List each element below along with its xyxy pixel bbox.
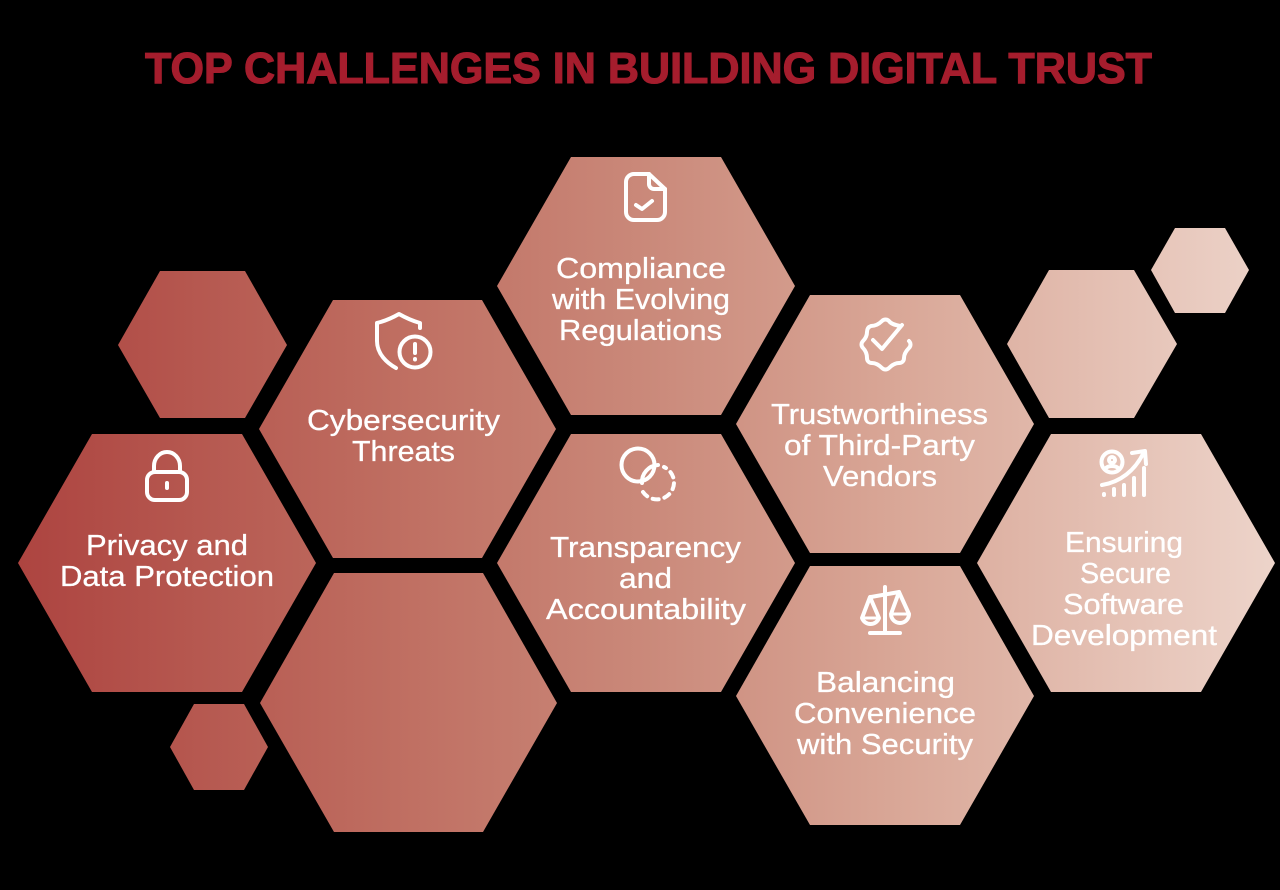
text: trustworthiness: [771, 399, 988, 493]
icon: lock: [147, 452, 187, 500]
icon: shield alert: [377, 314, 430, 368]
icon: overlapping circles: [622, 448, 674, 499]
decorative hexagon: upper right medium: [1007, 270, 1177, 418]
text: transparency: [546, 532, 747, 626]
text: transparency: and: [619, 563, 672, 595]
title: TOP CHALLENGES IN BUILDING DIGITAL TRUST: [145, 44, 1152, 93]
text: privacy: Data Protection: [60, 561, 274, 593]
panel: transparency: [497, 434, 795, 692]
text: trustworthiness: of Third-Party: [784, 430, 976, 462]
icon: growth chart: [1102, 451, 1146, 495]
decorative hexagon: upper left small: [118, 271, 287, 418]
text: compliance: [551, 253, 730, 347]
icon: scales: [862, 587, 909, 633]
icon: document check: [626, 174, 665, 220]
text: transparency: Accountability: [546, 594, 747, 626]
text: privacy: Privacy and: [86, 530, 248, 562]
text: trustworthiness: Trustworthiness: [771, 399, 988, 431]
text: balancing: Convenience: [794, 698, 976, 730]
text: privacy: [60, 530, 274, 593]
panel: compliance: [497, 157, 795, 415]
text: cybersecurity: Cybersecurity: [307, 405, 501, 437]
panel: third-party vendors: [736, 295, 1034, 553]
text: cybersecurity: Threats: [352, 436, 455, 468]
decorative hexagon: bottom large: [260, 573, 557, 832]
text: ensuring: Secure: [1080, 558, 1171, 590]
panel: secure software: [977, 434, 1275, 692]
text: cybersecurity: [307, 405, 501, 468]
text: compliance: Compliance: [556, 253, 726, 285]
text: ensuring: [1031, 527, 1217, 652]
text: ensuring: Development: [1031, 620, 1217, 652]
text: balancing: Balancing: [816, 667, 955, 699]
text: compliance: Regulations: [559, 315, 722, 347]
icon: badge check: [862, 320, 910, 370]
text: ensuring: Software: [1063, 589, 1184, 621]
panel: cybersecurity threats: [259, 300, 556, 558]
text: compliance: with Evolving: [551, 284, 730, 316]
panel: balancing convenience: [736, 566, 1034, 825]
text: balancing: with Security: [796, 729, 974, 761]
decorative hexagon: upper right tiny: [1151, 228, 1249, 313]
panel: privacy and data protection: [18, 434, 316, 692]
decorative hexagon: lower left tiny: [170, 704, 268, 790]
text: ensuring: Ensuring: [1065, 527, 1183, 559]
text: transparency: Transparency: [550, 532, 742, 564]
text: trustworthiness: Vendors: [823, 461, 937, 493]
text: balancing: [794, 667, 976, 761]
